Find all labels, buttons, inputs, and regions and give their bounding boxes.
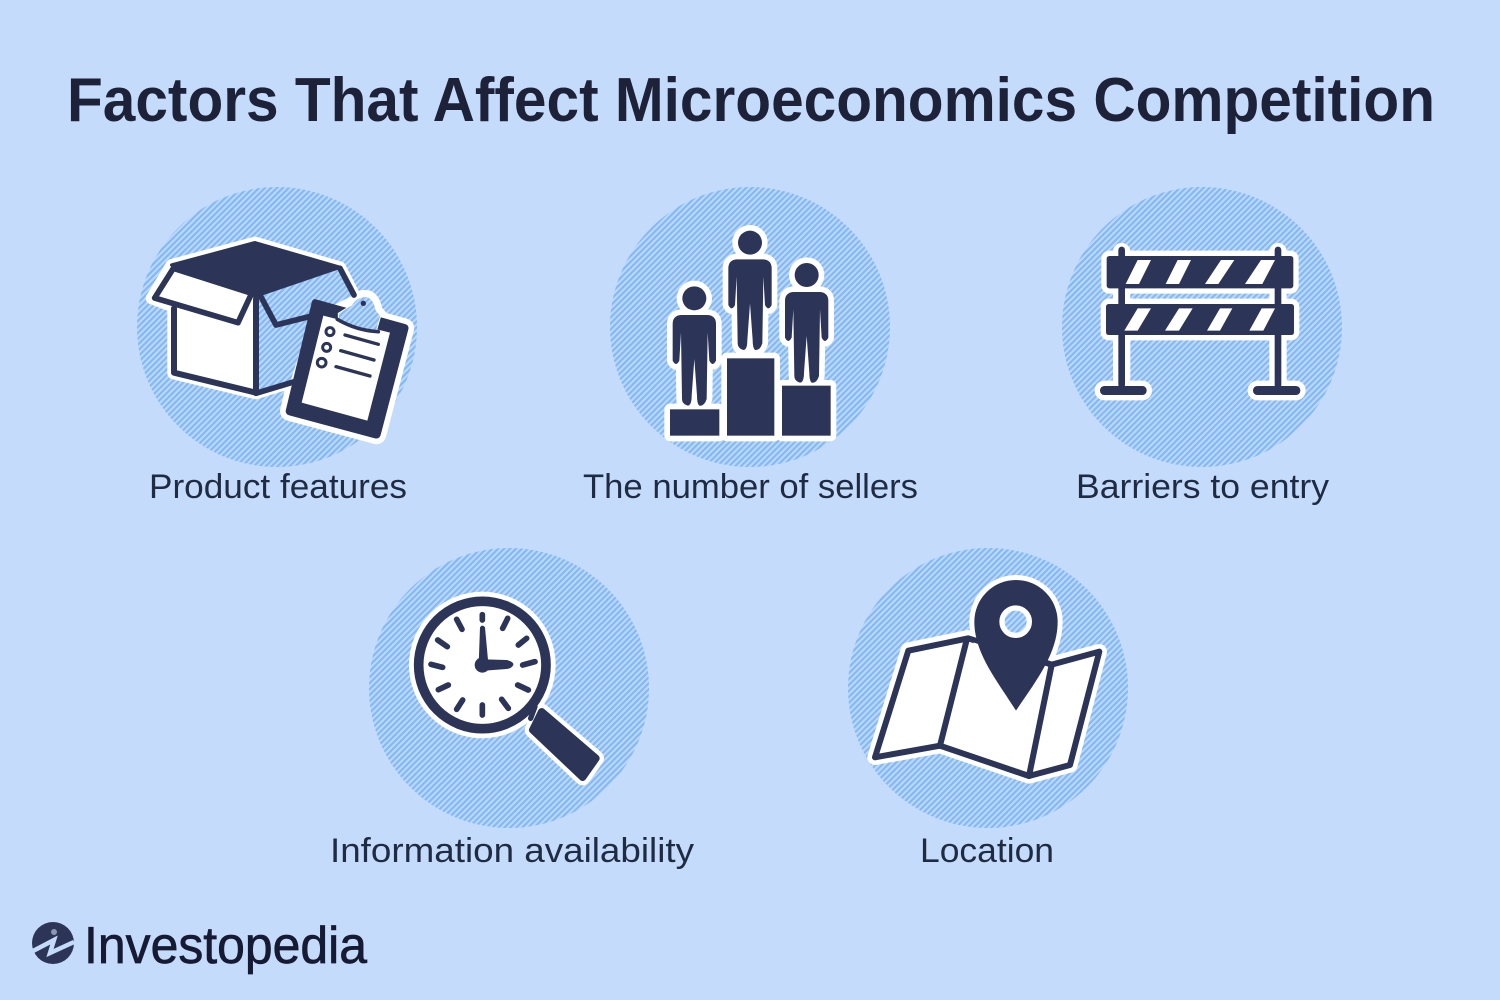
label: barriers to entry: Barriers to entry xyxy=(1076,468,1329,506)
label: the number of sellers: The number of sellers xyxy=(583,468,918,506)
panel: product features xyxy=(137,187,417,506)
logo wordmark: Investopedia xyxy=(84,917,367,975)
hatched circle: location xyxy=(848,548,1128,828)
icon: logo mark xyxy=(32,922,74,964)
panel: barriers to entry xyxy=(1062,187,1342,506)
panel: information availability xyxy=(330,548,694,870)
icon: road barrier xyxy=(1100,247,1300,395)
icon: open box and clipboard xyxy=(152,243,409,439)
label: location: Location xyxy=(920,832,1054,870)
icon: three figures on podium xyxy=(670,231,831,436)
hatched circle: sellers xyxy=(610,187,890,467)
label: information availability: Information availability xyxy=(330,832,694,870)
panel: the number of sellers xyxy=(583,187,918,506)
hatched circle: barriers xyxy=(1062,187,1342,467)
label: product features: Product features xyxy=(149,468,407,506)
panel: location xyxy=(848,548,1128,870)
hatched circle: information xyxy=(369,548,649,828)
logo: Investopedia xyxy=(32,917,367,975)
icon: magnifier with clock xyxy=(409,592,596,777)
hatched circle: product features xyxy=(137,187,417,467)
icon: map with pin xyxy=(875,580,1099,776)
title: Factors That Affect Microeconomics Competition xyxy=(67,66,1435,135)
